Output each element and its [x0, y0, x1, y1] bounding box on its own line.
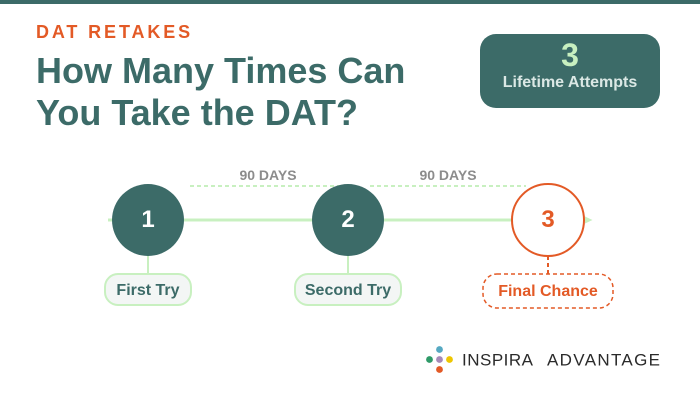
timeline arrow: [108, 216, 592, 224]
logo: Inspira Advantage: [426, 346, 660, 373]
logo: Inspira Advantage: INSPIRA: [462, 350, 534, 370]
badge number: 3: [561, 37, 579, 73]
step 1: [104, 184, 192, 306]
step 3 number: 3: [541, 206, 555, 233]
step 1: First Try: [116, 282, 180, 299]
title: [36, 50, 405, 133]
title: How Many Times Can: [36, 50, 405, 91]
step 3 label: Final Chance: [498, 283, 598, 300]
eyebrow heading: DAT RETAKES: [36, 22, 193, 42]
step 2: Second Try: [305, 282, 391, 299]
label: 90 DAYS: [419, 167, 477, 183]
step 2: 2: [341, 206, 355, 233]
title: You Take the DAT?: [36, 92, 358, 133]
step 2: [294, 184, 402, 306]
label: 90 DAYS: [239, 167, 297, 183]
step 1: 1: [141, 206, 155, 233]
badge label: Lifetime Attempts: [503, 74, 637, 91]
badge: lifetime attempts: [480, 34, 660, 108]
step 3: [482, 183, 614, 309]
logo: Inspira Advantage: ADVANTAGE: [547, 350, 660, 370]
